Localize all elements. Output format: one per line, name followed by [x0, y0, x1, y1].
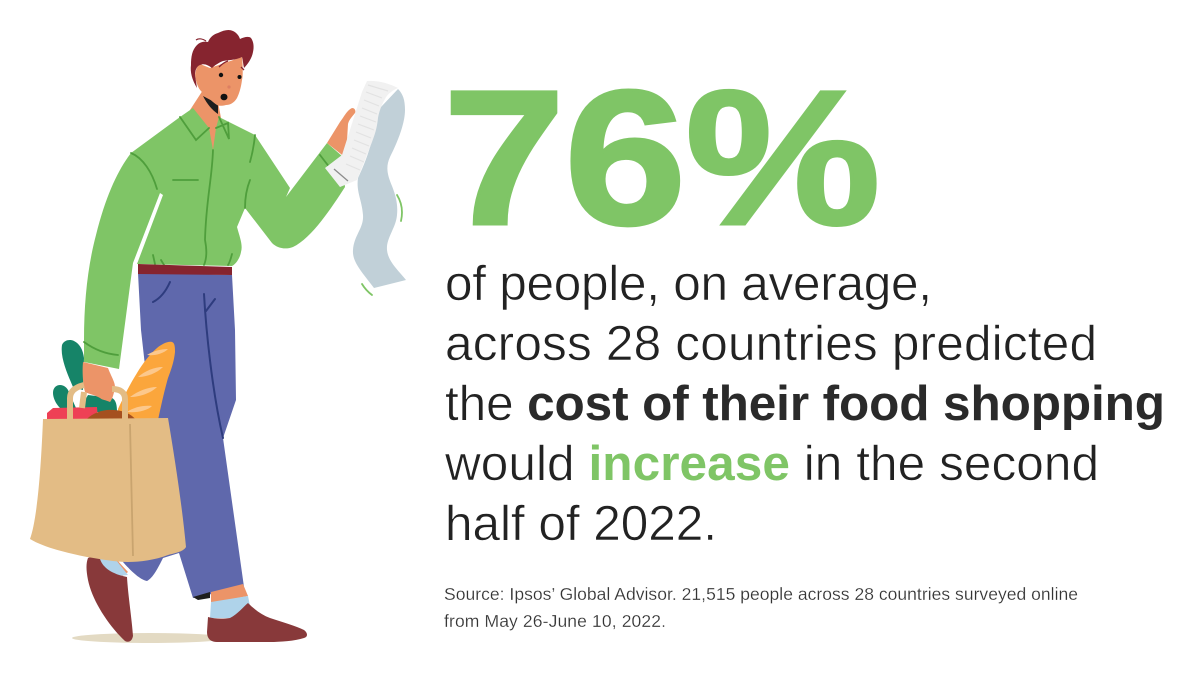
- back foot: [86, 557, 133, 642]
- source note: [444, 584, 1078, 631]
- line 5: half of 2022.: [445, 496, 717, 551]
- illustration: man with groceries and receipt: [30, 30, 406, 643]
- receipt front: [325, 81, 398, 187]
- line 1: of people, on average,: [445, 256, 932, 311]
- line 4: would increase in the second: [444, 436, 1099, 491]
- ground shadow: [72, 633, 228, 643]
- line 3: the cost of their food shopping: [445, 376, 1165, 431]
- source note: from May 26-June 10, 2022.: [444, 611, 666, 631]
- source note: Source: Ipsos’ Global Advisor. 21,515 people across 28 countries surveyed online: [444, 584, 1078, 604]
- big statistic: 76%: [443, 50, 880, 265]
- neck: [190, 90, 221, 152]
- hand: [83, 362, 115, 402]
- tomato: [47, 407, 98, 420]
- receipt back: [353, 89, 406, 295]
- grocery bag and contents: [30, 340, 186, 562]
- belt: [138, 264, 232, 275]
- baguette: [118, 342, 175, 420]
- trouser creases: [153, 282, 223, 438]
- front foot: [193, 584, 307, 642]
- main statement: [444, 256, 1165, 551]
- bag body: [30, 418, 186, 562]
- shirt: [84, 108, 345, 369]
- raised hand: [327, 108, 355, 158]
- beard shadow: [203, 96, 218, 114]
- line 2: across 28 countries predicted: [445, 316, 1097, 371]
- face: [195, 57, 243, 106]
- hair: [191, 30, 254, 88]
- trousers: [123, 273, 244, 598]
- leaves: [53, 340, 117, 412]
- bread: [85, 410, 136, 421]
- handles: [70, 385, 125, 422]
- head: [191, 30, 254, 114]
